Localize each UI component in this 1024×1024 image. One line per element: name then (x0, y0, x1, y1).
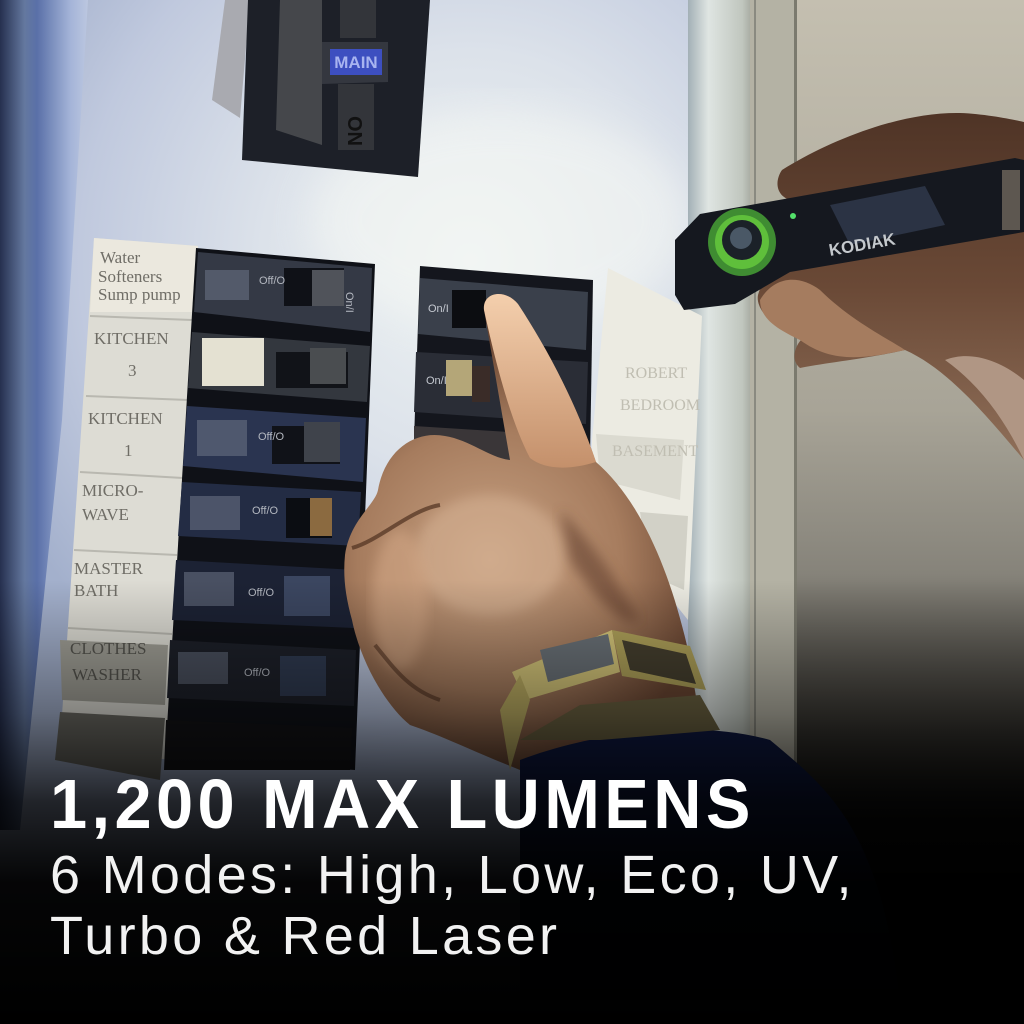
label strip: left: Softeners (98, 267, 162, 286)
flashlight: KODIAK (827, 229, 897, 260)
label strip: left: 1 (124, 441, 132, 460)
panel left edge (0, 0, 88, 830)
label strip: left: MASTER (74, 559, 144, 578)
label strip: left: CLOTHES (70, 639, 146, 658)
label strip: left: KITCHEN (94, 329, 169, 348)
label strip: left: 3 (128, 361, 136, 380)
subtitle: 6 Modes: High, Low, Eco, UV, (50, 845, 855, 905)
label strip: left: WAVE (82, 505, 129, 524)
bottom dark fade (0, 580, 1024, 1024)
flashlight (675, 158, 1024, 310)
left breaker column: Off/O (258, 431, 285, 443)
label strip: left: WASHER (72, 665, 143, 684)
subtitle (50, 845, 855, 966)
light glow (310, 110, 690, 330)
main breaker (212, 0, 430, 177)
label strip: right: ROBERT (625, 365, 687, 382)
background: wall (795, 0, 1024, 1024)
left breaker column: On/I (343, 292, 355, 313)
label strip: left (55, 238, 198, 780)
left breaker column (164, 248, 375, 770)
background: panel door (0, 0, 760, 1024)
right hand (758, 113, 1024, 460)
subtitle: Turbo & Red Laser (50, 906, 560, 966)
label strip: left: BATH (74, 581, 118, 600)
label strip: left: KITCHEN (88, 409, 163, 428)
watch (500, 630, 720, 770)
headline: 1,200 MAX LUMENS (50, 765, 755, 843)
main breaker: ON (343, 116, 365, 146)
label strip: right: BASEMENT (612, 443, 698, 460)
right breaker column (414, 266, 593, 470)
left breaker column: Off/O (244, 667, 271, 679)
panel rails (688, 0, 797, 800)
left breaker column: Off/O (252, 505, 279, 517)
left breaker column: Off/O (248, 587, 275, 599)
label strip: right (592, 268, 702, 620)
right breaker column: On/I (426, 375, 447, 387)
label strip: left: Sump pump (98, 285, 181, 304)
sleeve (520, 730, 900, 1000)
label strip: left: MICRO- (82, 481, 144, 500)
left breaker column: Off/O (259, 275, 286, 287)
label strip: left: Water (100, 248, 140, 267)
left hand (344, 294, 700, 770)
label strip: right: BEDROOM (620, 397, 700, 414)
right breaker column: On/I (428, 303, 449, 315)
main breaker: MAIN (334, 53, 378, 72)
